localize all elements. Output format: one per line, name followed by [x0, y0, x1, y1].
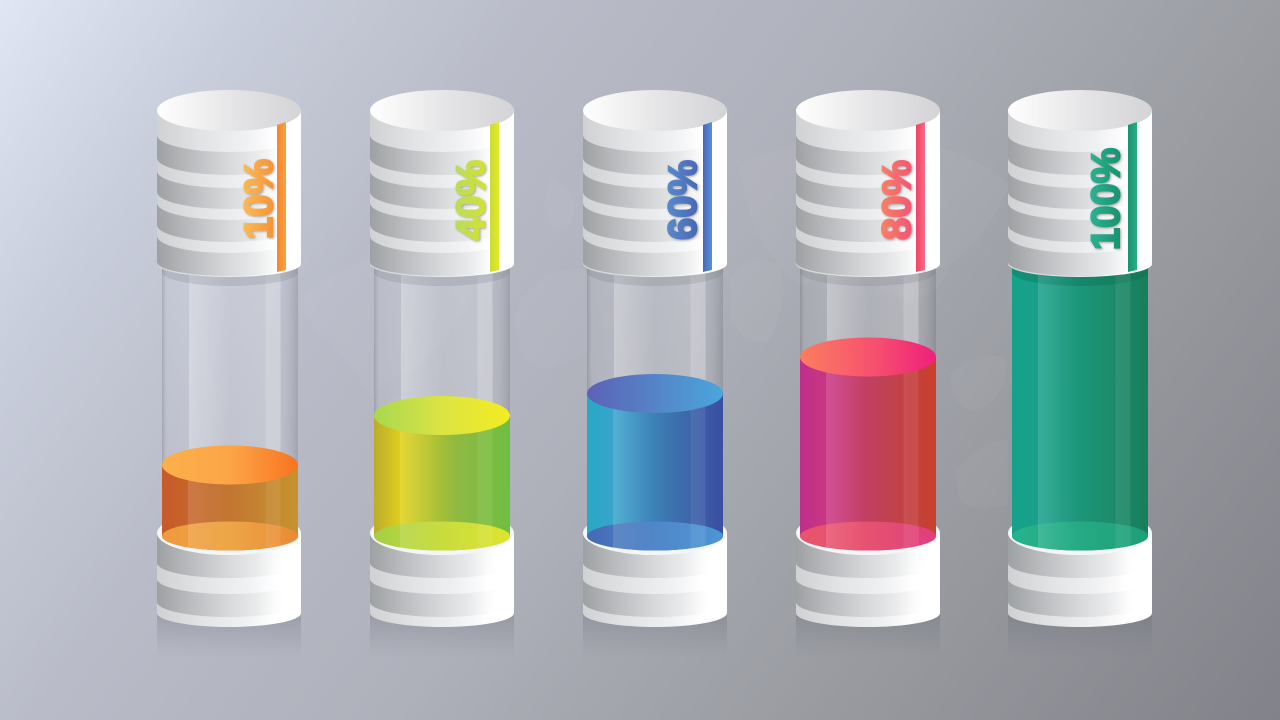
label 10%: 10%: [237, 159, 281, 239]
colour bar 60%: [703, 122, 712, 272]
tube 40%: [370, 90, 514, 658]
base 40%: [370, 511, 514, 658]
base 10%: [157, 511, 301, 658]
colour bar 40%: [490, 122, 499, 272]
glass 80%: [800, 262, 936, 536]
cap 80%: [796, 90, 940, 277]
tube 60%: [583, 90, 727, 658]
label 40%: 40%: [449, 160, 493, 240]
tube 80%: [796, 90, 940, 658]
world map watermark: [300, 139, 1010, 510]
cap 10%: [157, 90, 301, 277]
liquid 100%: [1012, 262, 1148, 550]
glass 40%: [374, 262, 510, 536]
glass 60%: [587, 262, 723, 536]
label 80%: 80%: [875, 160, 919, 240]
cap 100%: [1008, 90, 1152, 277]
base 60%: [583, 511, 727, 658]
cap 60%: [583, 90, 727, 277]
glass 10%: [162, 262, 298, 536]
colour bar 10%: [277, 122, 286, 272]
colour bar 80%: [916, 122, 925, 272]
tube 10%: [157, 90, 301, 658]
base 100%: [1008, 511, 1152, 658]
colour bar 100%: [1128, 122, 1137, 272]
base 80%: [796, 511, 940, 658]
liquid 80%: [800, 338, 936, 550]
label 100%: 100%: [1084, 148, 1128, 250]
liquid 60%: [587, 374, 723, 550]
label 60%: 60%: [661, 160, 705, 240]
cap 40%: [370, 90, 514, 277]
liquid 10%: [162, 446, 298, 550]
liquid 40%: [374, 396, 510, 550]
tube 100%: [1008, 90, 1152, 658]
